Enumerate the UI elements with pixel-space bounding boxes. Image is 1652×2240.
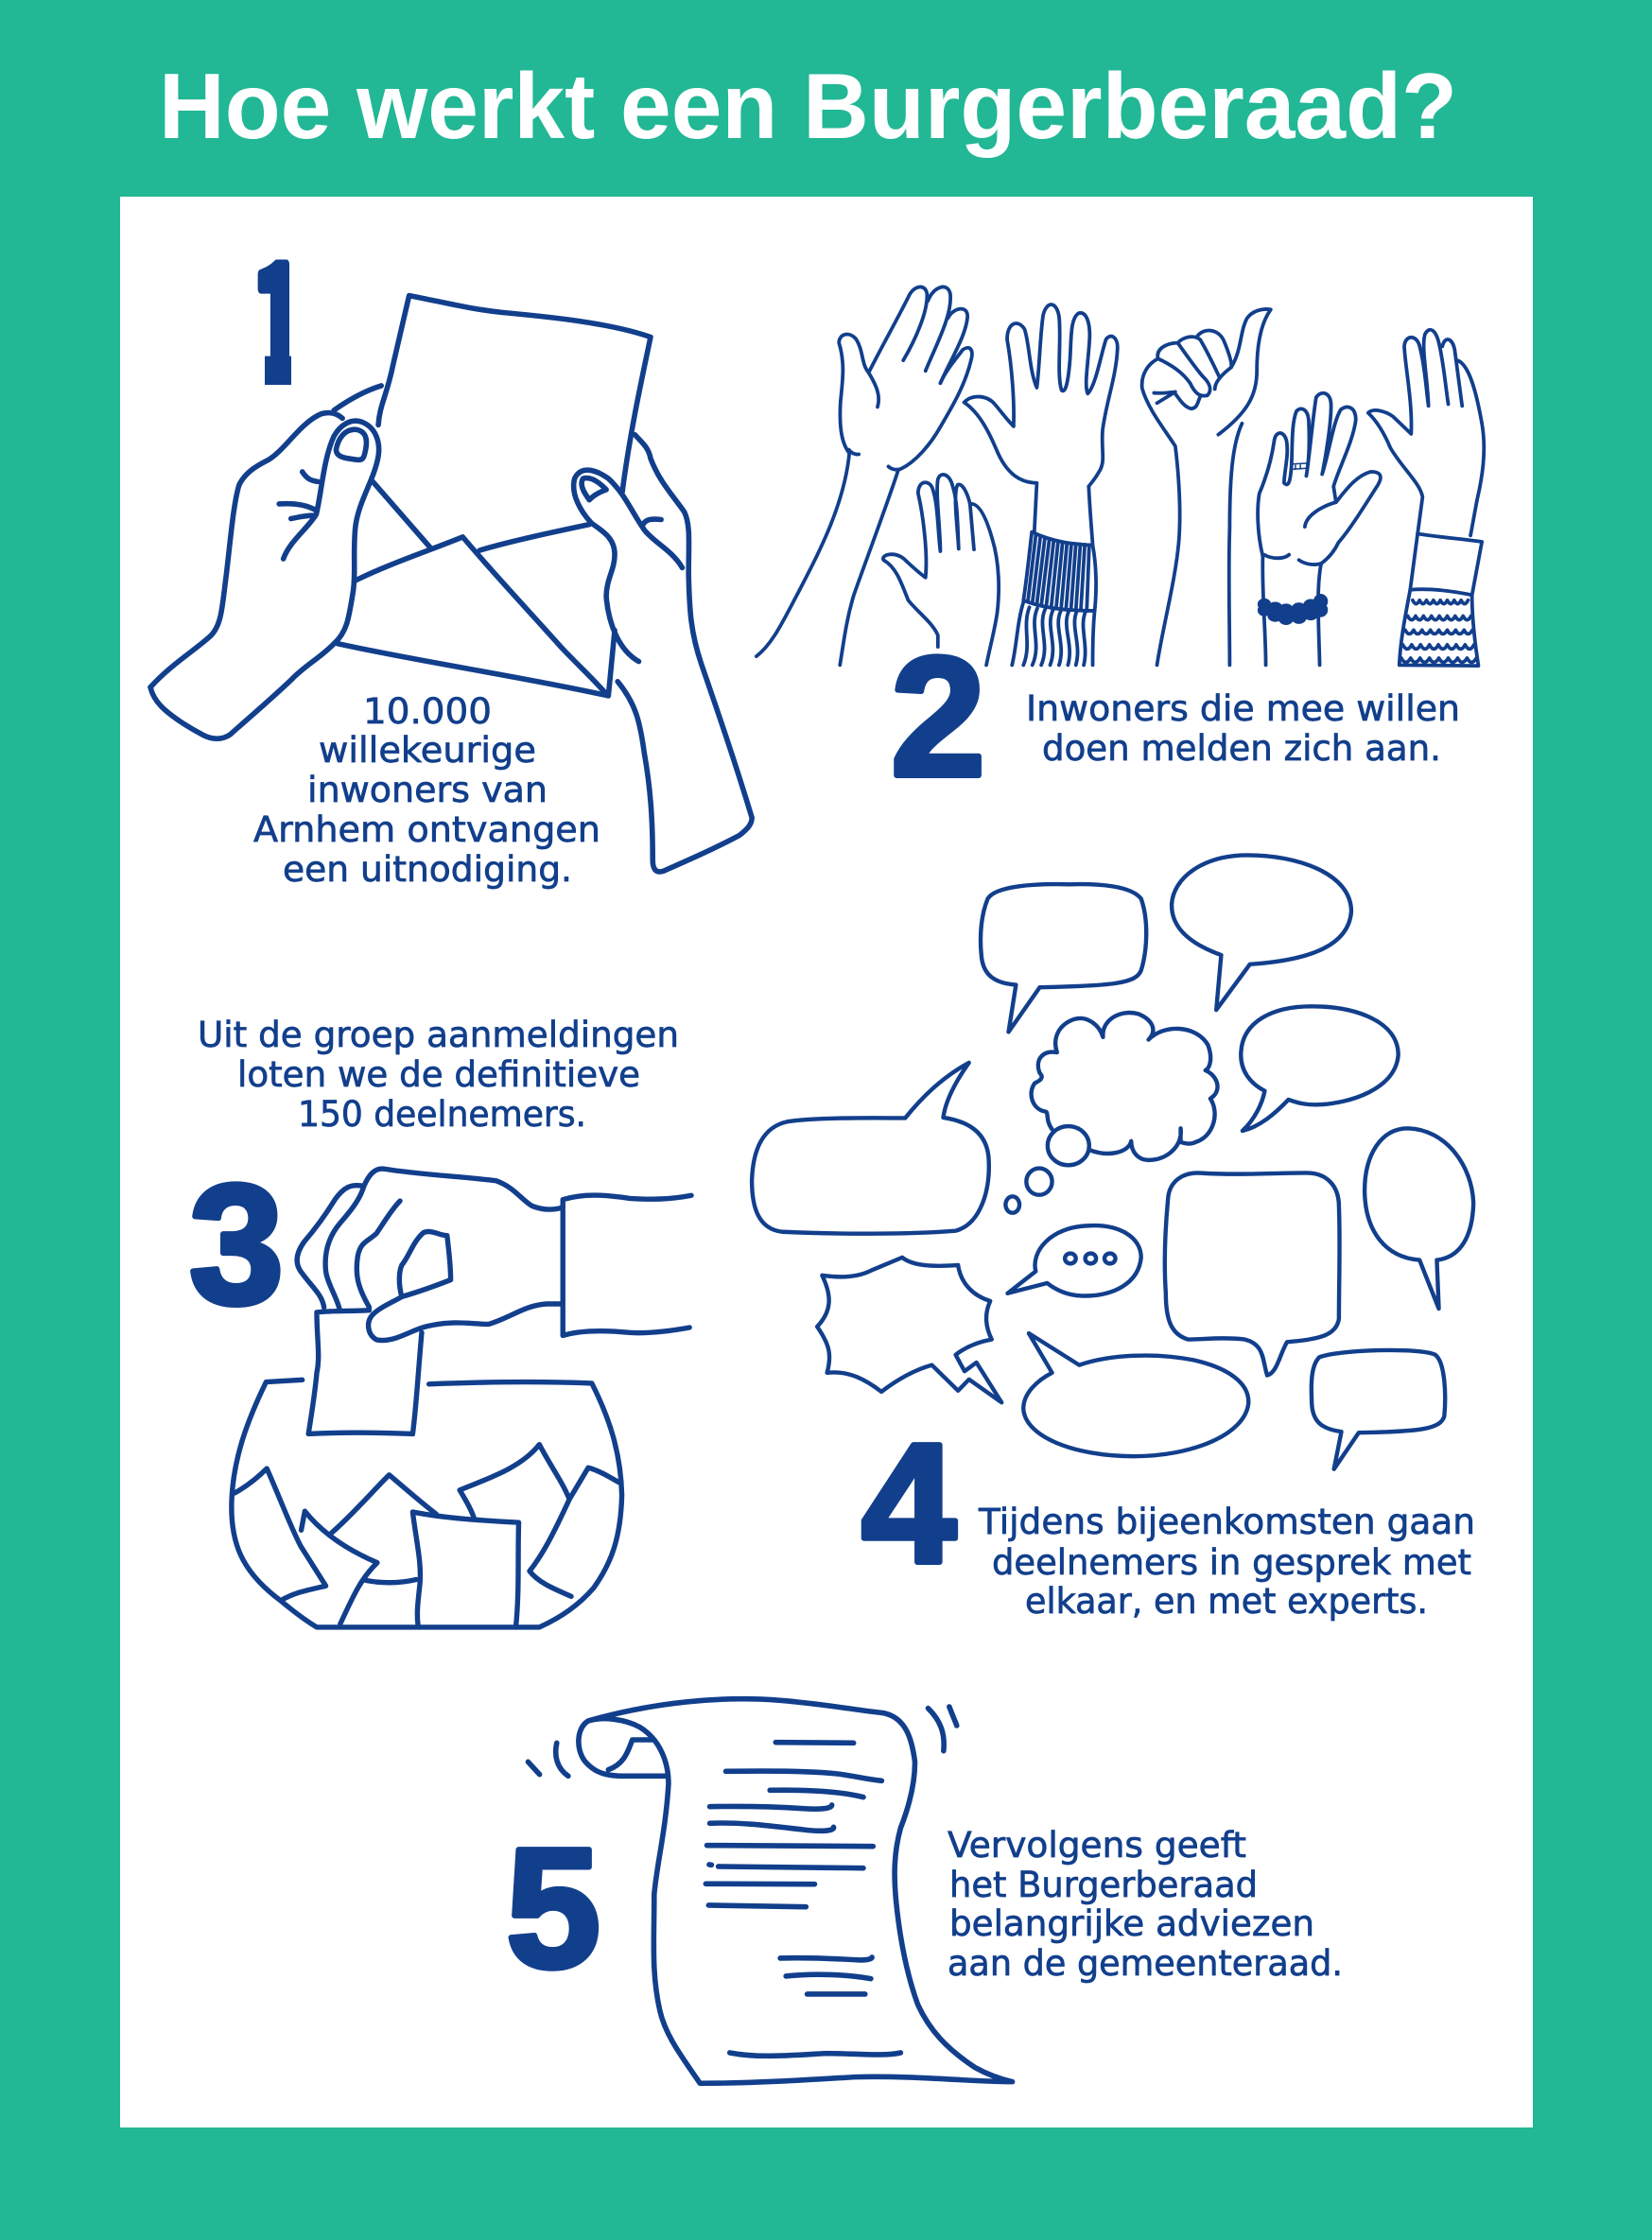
icon: raised hands (756, 287, 1484, 666)
number 5: 5 (506, 1814, 600, 2004)
caption step 4 (978, 1502, 1475, 1622)
caption step 3: Uit de groep aanmeldingen (198, 1015, 679, 1055)
number 2: 2 (891, 622, 985, 812)
icon: hand drawing lot from bowl (232, 1169, 691, 1627)
caption step 1 (253, 691, 600, 890)
icon: hands opening envelope (150, 296, 752, 872)
caption step 5: Vervolgens geeft (948, 1825, 1246, 1866)
caption step 5: belangrijke adviezen (949, 1903, 1314, 1944)
caption step 2 (1026, 688, 1460, 769)
caption step 3 (198, 1015, 679, 1135)
caption step 1: Arnhem ontvangen (253, 809, 600, 850)
white panel (120, 197, 1533, 2127)
number 4: 4 (861, 1409, 956, 1599)
caption step 4: deelnemers in gesprek met (992, 1542, 1471, 1583)
icon: advice scroll (528, 1699, 1013, 2083)
caption step 2: doen melden zich aan. (1042, 728, 1441, 769)
number 3: 3 (189, 1150, 284, 1340)
caption step 1: willekeurige (319, 730, 536, 771)
step 1 (150, 194, 752, 890)
caption step 5: het Burgerberaad (949, 1865, 1258, 1905)
step 2 (756, 287, 1484, 812)
step 5 (506, 1699, 1343, 2083)
number 1: 1 (251, 194, 305, 426)
caption step 1: 10.000 (363, 691, 492, 732)
caption step 5 (948, 1825, 1343, 1984)
caption step 5: aan de gemeenteraad. (948, 1943, 1343, 1984)
caption step 3: 150 deelnemers. (298, 1094, 586, 1135)
caption step 3: loten we de definitieve (237, 1054, 640, 1095)
caption step 4: elkaar, en met experts. (1025, 1581, 1428, 1622)
caption step 4: Tijdens bijeenkomsten gaan (978, 1502, 1475, 1542)
step 4 (752, 855, 1475, 1622)
step 3 (189, 1015, 691, 1627)
icon: speech bubbles (752, 855, 1473, 1469)
caption step 2: Inwoners die mee willen (1026, 688, 1460, 729)
caption step 1: inwoners van (307, 770, 548, 810)
caption step 1: een uitnodiging. (283, 849, 572, 890)
title: Hoe werkt een Burgerberaad? (159, 54, 1457, 158)
